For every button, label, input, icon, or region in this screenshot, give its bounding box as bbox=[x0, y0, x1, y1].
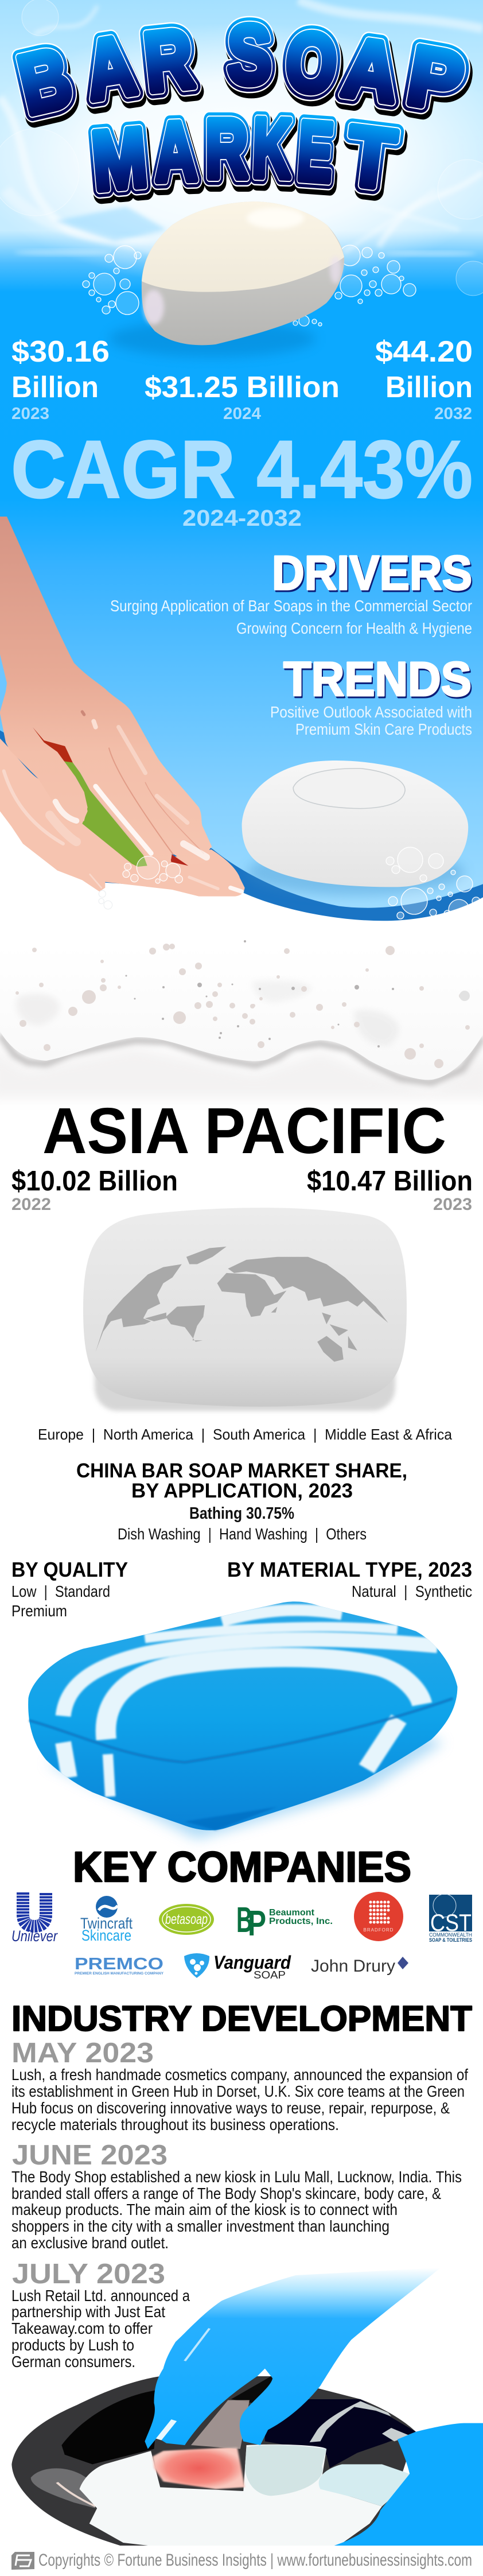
stat: Asia Pacific 2022 bbox=[11, 1166, 178, 1214]
blue striped soap bbox=[28, 1601, 457, 1839]
title: Bar Soap Market: S bbox=[229, 13, 273, 106]
title: Bar Soap Market: O bbox=[284, 18, 342, 116]
trends list bbox=[270, 703, 472, 738]
title: Bar Soap Market: B bbox=[11, 30, 80, 132]
green soap bar bbox=[59, 761, 147, 867]
stat: Asia Pacific 2022: $10.02 Billion bbox=[11, 1166, 178, 1197]
June 2023 text: makeup products. The main aim of the kiosk is to connect with bbox=[11, 2201, 398, 2218]
soap shadow bbox=[109, 320, 315, 357]
logo: Beaumont Products: Beaumont bbox=[269, 1908, 315, 1918]
red sponge bbox=[153, 2447, 245, 2489]
July 2023 text: Takeaway.com to offer bbox=[11, 2319, 153, 2337]
title: Bar Soap Market: T bbox=[342, 108, 400, 207]
right glove bbox=[334, 2423, 483, 2546]
drivers heading: DRIVERS bbox=[273, 548, 473, 602]
logo: Beaumont Products bbox=[236, 1900, 333, 1943]
trends heading: TRENDS bbox=[285, 654, 473, 708]
top soap bar bbox=[142, 201, 344, 345]
title: Bar Soap Market: E bbox=[295, 103, 336, 199]
title: Bar Soap Market: E bbox=[295, 103, 336, 199]
stat: Asia Pacific 2023: 2023 bbox=[433, 1195, 472, 1214]
hands washing with soap bbox=[0, 517, 245, 909]
title: Bar Soap Market: P bbox=[402, 29, 470, 129]
logo: Commonwealth Soap & Toiletries: COMMONWEALTH bbox=[429, 1932, 472, 1938]
logo: Vanguard Soap: Vanguard bbox=[213, 1952, 291, 1973]
title: Bar Soap Market: E bbox=[297, 108, 338, 204]
logo: Beaumont Products: Products, Inc. bbox=[269, 1917, 333, 1926]
logo: Commonwealth Soap & Toiletries: CST bbox=[430, 1909, 472, 1936]
logo: Vanguard Soap: SOAP bbox=[254, 1969, 286, 1981]
title: Bar Soap Market: A bbox=[79, 18, 141, 117]
upper hand and arm bbox=[0, 517, 212, 865]
logo: Vanguard Soap bbox=[184, 1952, 291, 1981]
stat: 2032 market size: Billion bbox=[385, 371, 473, 404]
application list: Dish Washing | Hand Washing | Others bbox=[118, 1525, 367, 1543]
May 2023 text: recycle materials throughout its business operations. bbox=[11, 2116, 339, 2133]
white wave with blue swoosh bbox=[0, 730, 483, 985]
stat: 2023 market size: $30.16 bbox=[11, 335, 110, 368]
title: Bar Soap Market: E bbox=[295, 103, 336, 199]
title: Bar Soap Market: T bbox=[342, 108, 400, 207]
bathing share: Bathing 30.75% bbox=[189, 1504, 294, 1523]
China share heading: CHINA BAR SOAP MARKET SHARE, bbox=[76, 1460, 407, 1482]
trends heading: TRENDS bbox=[283, 652, 472, 706]
stat: 2032 market size: $44.20 bbox=[375, 335, 473, 368]
June 2023 text bbox=[11, 2168, 462, 2252]
sink scene with gloved hands bbox=[11, 2268, 483, 2546]
title: Bar Soap Market: K bbox=[251, 101, 293, 195]
logo: betasoap: betasoap bbox=[165, 1911, 208, 1927]
title: Bar Soap Market: R bbox=[140, 11, 197, 109]
stat: Asia Pacific 2023 bbox=[307, 1166, 473, 1214]
stat: 2023 market size: Billion bbox=[11, 371, 99, 404]
title: Bar Soap Market: A bbox=[81, 22, 143, 122]
stat: Asia Pacific 2022: 2022 bbox=[11, 1195, 51, 1214]
logo: Unilever: Unilever bbox=[11, 1927, 58, 1945]
title: Bar Soap Market: M bbox=[88, 110, 150, 208]
title: Bar Soap Market: S bbox=[228, 8, 271, 101]
by material type: BY MATERIAL TYPE, 2023 bbox=[227, 1558, 472, 1581]
China share heading bbox=[76, 1460, 407, 1502]
logo: Beaumont Products: P bbox=[248, 1904, 266, 1943]
title: Bar Soap Market: R bbox=[140, 11, 197, 109]
arm edge notch bbox=[0, 654, 7, 712]
stat: 2032 market size bbox=[375, 335, 473, 423]
title: Bar Soap Market: A bbox=[340, 25, 406, 125]
title: Bar Soap Market bbox=[11, 8, 472, 212]
title: Bar Soap Market: O bbox=[282, 14, 341, 111]
by material type bbox=[227, 1558, 472, 1600]
key companies heading: KEY COMPANIES bbox=[73, 1843, 411, 1891]
main glove bbox=[145, 2268, 441, 2449]
July 2023 text: Lush Retail Ltd. announced a bbox=[11, 2287, 190, 2305]
bubbles on pebble soap bbox=[386, 847, 480, 920]
title: Bar Soap Market: P bbox=[402, 29, 470, 129]
title: Bar Soap Market: T bbox=[342, 108, 400, 207]
footer logo bbox=[11, 2552, 34, 2570]
title: Bar Soap Market: R bbox=[205, 102, 248, 195]
pebble soap shadow bbox=[247, 849, 465, 895]
logo: Commonwealth Soap & Toiletries: SOAP & TOILETRIES bbox=[429, 1937, 472, 1943]
stat: Asia Pacific 2023: $10.47 Billion bbox=[307, 1166, 473, 1197]
title: Bar Soap Market: A bbox=[79, 18, 141, 117]
July 2023 text: partnership with Just Eat bbox=[11, 2303, 165, 2321]
logo: John Drury: John Drury bbox=[311, 1957, 395, 1976]
China share heading: BY APPLICATION, 2023 bbox=[131, 1480, 353, 1502]
shadow gap between hands bbox=[33, 727, 73, 763]
title: Bar Soap Market: R bbox=[140, 11, 197, 109]
logo: Bradford bbox=[354, 1892, 403, 1941]
logo: Twincraft Skincare: Twincraft bbox=[80, 1915, 133, 1932]
lower hand bbox=[0, 739, 245, 897]
title: Bar Soap Market: R bbox=[205, 102, 248, 195]
logo: Commonwealth Soap & Toiletries bbox=[429, 1894, 472, 1943]
logo: Bradford: BRADFORD bbox=[364, 1927, 394, 1933]
title: Bar Soap Market: O bbox=[282, 14, 341, 111]
title: Bar Soap Market: M bbox=[88, 110, 150, 208]
title: Bar Soap Market: S bbox=[228, 8, 271, 101]
July 2023 text: German consumers. bbox=[11, 2353, 135, 2371]
title: Bar Soap Market: O bbox=[282, 14, 341, 111]
logo: Premco: PREMCO bbox=[75, 1955, 163, 1973]
title: Bar Soap Market: O bbox=[282, 14, 341, 111]
title: Bar Soap Market: R bbox=[205, 102, 248, 195]
title: Bar Soap Market: A bbox=[153, 104, 198, 199]
title: Bar Soap Market: K bbox=[251, 101, 293, 195]
title: Bar Soap Market: S bbox=[228, 8, 271, 101]
region heading: Asia Pacific: ASIA PACIFIC bbox=[42, 1095, 446, 1167]
title: Bar Soap Market: A bbox=[79, 18, 141, 117]
title: Bar Soap Market: A bbox=[338, 21, 404, 120]
title: Bar Soap Market: K bbox=[251, 101, 293, 195]
bubbles over fingers bbox=[99, 856, 182, 909]
title: Bar Soap Market: B bbox=[13, 35, 81, 137]
foam band bbox=[0, 929, 483, 1099]
title: Bar Soap Market: S bbox=[228, 8, 271, 101]
grey soap with world map bbox=[83, 1208, 407, 1411]
logo: Twincraft Skincare: Skincare bbox=[81, 1927, 131, 1944]
title: Bar Soap Market: R bbox=[140, 11, 197, 109]
stat: 2024 market size: 2024 bbox=[223, 405, 261, 423]
July 2023 text: products by Lush to bbox=[11, 2336, 134, 2354]
dark gap near fingertip bbox=[170, 854, 188, 866]
title: Bar Soap Market: M bbox=[88, 110, 150, 208]
title: Bar Soap Market: A bbox=[338, 21, 404, 120]
foam bbox=[80, 2445, 382, 2546]
stat: 2024 market size bbox=[145, 371, 340, 423]
by quality bbox=[11, 1558, 128, 1620]
July 2023 date: JULY 2023 bbox=[12, 2259, 165, 2290]
title: Bar Soap Market: K bbox=[251, 101, 293, 195]
title: Bar Soap Market: A bbox=[79, 18, 141, 117]
stat: 2024 market size: $31.25 Billion bbox=[145, 371, 340, 404]
drivers heading: DRIVERS bbox=[272, 546, 472, 600]
title: Bar Soap Market: K bbox=[253, 106, 294, 200]
drivers list bbox=[110, 597, 472, 637]
title: Bar Soap Market: R bbox=[205, 102, 248, 195]
July 2023 text bbox=[11, 2287, 190, 2371]
darker foam bubbles bbox=[125, 940, 470, 1048]
title: Bar Soap Market: M bbox=[90, 115, 152, 212]
title: Bar Soap Market: A bbox=[338, 21, 404, 120]
logo: Twincraft Skincare bbox=[80, 1896, 133, 1944]
logo: Unilever bbox=[11, 1892, 58, 1945]
title: Bar Soap Market: P bbox=[402, 29, 470, 129]
June 2023 date: JUNE 2023 bbox=[12, 2140, 168, 2171]
blue water background bbox=[0, 0, 483, 941]
logo: betasoap bbox=[159, 1904, 214, 1935]
title: Bar Soap Market: A bbox=[155, 109, 200, 204]
stat: 2023 market size bbox=[11, 335, 110, 423]
May 2023 text bbox=[11, 2066, 468, 2133]
title: Bar Soap Market: P bbox=[403, 33, 472, 134]
title: Bar Soap Market: P bbox=[402, 29, 470, 129]
title: Bar Soap Market: B bbox=[11, 30, 80, 132]
logo: Beaumont Products: B bbox=[236, 1900, 252, 1940]
by quality: Low | Standard bbox=[11, 1582, 110, 1600]
stat: 2023 market size: 2023 bbox=[11, 405, 49, 423]
title: Bar Soap Market: R bbox=[207, 107, 250, 200]
title: Bar Soap Market: B bbox=[11, 30, 80, 132]
title: Bar Soap Market: M bbox=[88, 110, 150, 208]
June 2023 text: an exclusive brand outlet. bbox=[11, 2234, 169, 2252]
by quality: Premium bbox=[11, 1602, 67, 1620]
stat: 2032 market size: 2032 bbox=[434, 405, 472, 423]
title: Bar Soap Market: A bbox=[153, 104, 198, 199]
title: Bar Soap Market: T bbox=[342, 108, 400, 207]
soap bubbles around top soap bbox=[83, 245, 416, 326]
title: Bar Soap Market: A bbox=[153, 104, 198, 199]
title: Bar Soap Market: E bbox=[295, 103, 336, 199]
by quality: BY QUALITY bbox=[11, 1558, 128, 1581]
lower hand foam bbox=[4, 771, 242, 891]
title: Bar Soap Market: A bbox=[153, 104, 198, 199]
white pebble soap bbox=[242, 761, 468, 887]
CAGR period: 2024-2032 bbox=[182, 506, 302, 531]
title: Bar Soap Market: T bbox=[344, 112, 402, 211]
title: Bar Soap Market: R bbox=[142, 16, 199, 114]
black bowl bbox=[11, 2376, 416, 2546]
logo: Premco: PREMIER ENGLISH MANUFACTURING COMPANY bbox=[75, 1972, 164, 1976]
May 2023 date: MAY 2023 bbox=[11, 2038, 154, 2069]
other regions list: Europe | North America | South America | Middle East & Africa bbox=[38, 1426, 453, 1443]
title: Bar Soap Market: A bbox=[338, 21, 404, 120]
industry development heading: INDUSTRY DEVELOPMENT bbox=[11, 1999, 472, 2039]
finger foam and creases bbox=[56, 712, 207, 857]
June 2023 text: shoppers in the city with a smaller investment than launching bbox=[11, 2217, 389, 2235]
title: Bar Soap Market: B bbox=[11, 30, 80, 132]
